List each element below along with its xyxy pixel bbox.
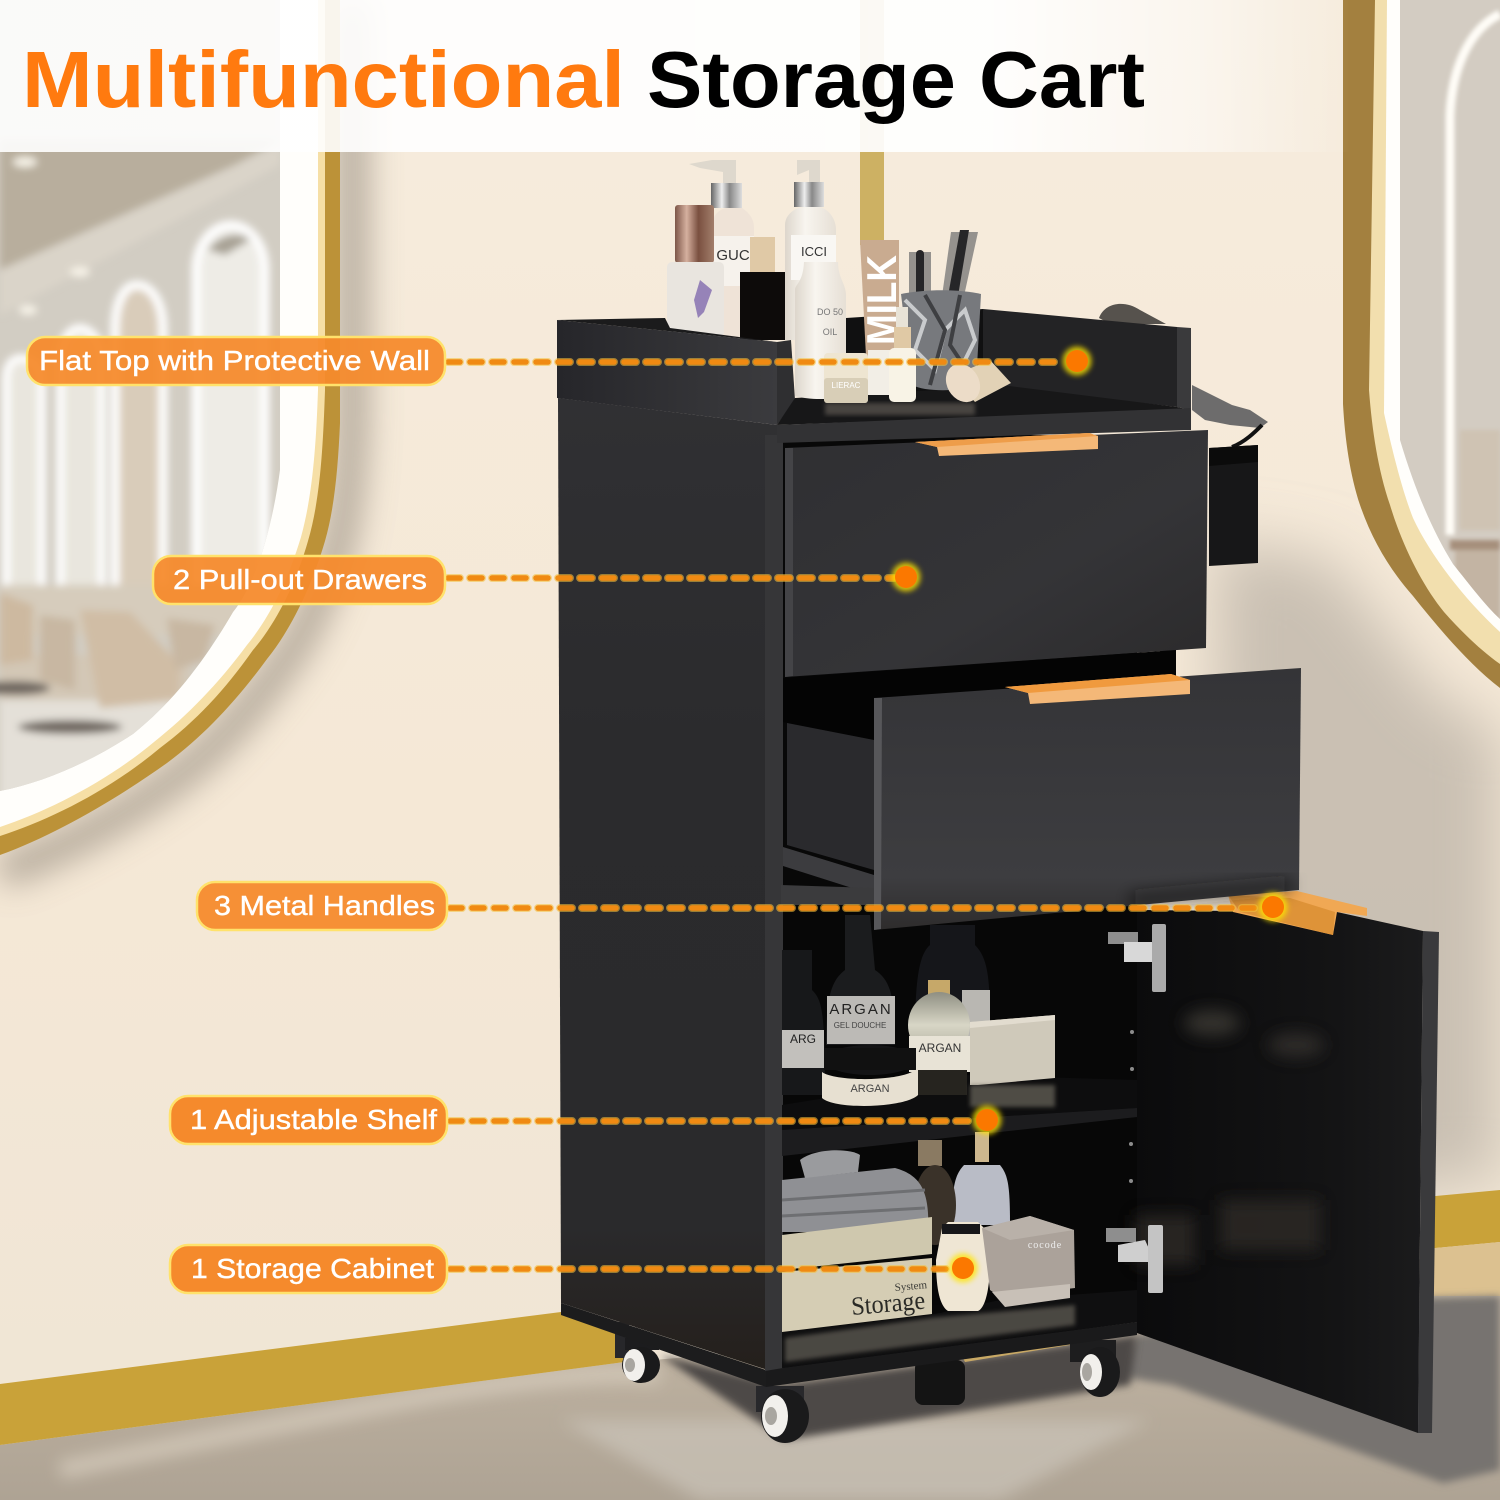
storage box bottom: Storage	[850, 1286, 926, 1321]
drawer two interior	[781, 650, 1176, 905]
blue white bottle	[952, 1132, 1010, 1225]
top wall left front end	[777, 340, 795, 425]
door reflection blurs	[1135, 1010, 1324, 1265]
adjustable shelf	[782, 1075, 1137, 1156]
cocode box	[982, 1216, 1075, 1307]
callout: pull-out drawers	[153, 556, 920, 604]
drawer two handle	[1005, 674, 1190, 704]
back wall behind cosmetics	[846, 309, 1009, 402]
leader line	[450, 904, 1260, 912]
right stile behind drawers	[1160, 640, 1176, 700]
gold strip behind cosmetics	[860, 0, 884, 245]
dot	[1258, 892, 1288, 922]
title banner	[0, 0, 1500, 152]
right mirror reflected salon	[1395, 0, 1500, 640]
milk tube: MILK	[858, 255, 905, 345]
lying beige cylinder	[939, 358, 1011, 408]
dot	[972, 1106, 1002, 1134]
callout: flat top with protective wall	[27, 337, 1092, 385]
pump bottle 2	[785, 160, 836, 340]
right mirror	[1343, 0, 1500, 688]
callout: storage cabinet	[170, 1245, 978, 1293]
label: 3 Metal Handles	[214, 890, 435, 921]
label: Flat Top with Protective Wall	[39, 345, 430, 376]
caster rear left	[615, 1322, 660, 1383]
left mirror cream edge	[0, 0, 325, 836]
top surface	[777, 386, 1191, 425]
leader line	[450, 1265, 951, 1273]
bottom hinge	[1106, 1225, 1163, 1293]
drawer two lower shadow	[1130, 880, 1290, 905]
cabinet back	[783, 905, 1137, 1305]
floor tan band right	[1425, 1242, 1500, 1296]
left stile	[765, 435, 783, 1371]
leader line	[450, 1117, 975, 1125]
left mirror wall shadow	[0, 0, 352, 872]
pump bottle 1	[689, 160, 754, 340]
top front edge	[777, 408, 1191, 443]
argan bottle middle: ARGAN	[829, 1001, 893, 1018]
door gold handle	[1228, 891, 1367, 935]
left mirror	[0, 0, 352, 872]
folded towels	[782, 1150, 928, 1232]
floor	[0, 1242, 1500, 1500]
argan jar	[822, 1045, 918, 1106]
storage box bottom	[782, 1258, 932, 1332]
storage box bottom: System	[894, 1279, 928, 1294]
drawer one	[785, 430, 1208, 677]
argan bottle back right	[915, 925, 990, 1040]
gold baseboard right	[1425, 1190, 1500, 1249]
drawer two front	[874, 668, 1301, 930]
door shadow on floor	[1110, 1296, 1500, 1483]
hair dryer body and cord	[1192, 385, 1268, 447]
door edge	[1418, 931, 1439, 1433]
white bottle front: OIL	[823, 327, 837, 337]
label	[170, 1096, 447, 1144]
argan bottle left	[782, 950, 825, 1095]
top wall right	[983, 309, 1177, 407]
caster front left	[756, 1386, 809, 1443]
label	[170, 1245, 447, 1293]
label	[197, 882, 447, 930]
top wall left side	[557, 320, 777, 425]
right mirror gold frame	[1343, 0, 1500, 688]
title	[22, 35, 1145, 124]
cabinet base front	[766, 1322, 1137, 1387]
cart shadow on floor	[660, 1335, 1137, 1440]
callout: adjustable shelf	[170, 1096, 1002, 1144]
perfume bottle: ARGAN	[919, 1041, 961, 1055]
right mirror cream edge	[1369, 0, 1500, 664]
crystal cup	[901, 290, 981, 390]
milk tube	[858, 240, 905, 395]
pump bottle 2: ICCI	[801, 244, 827, 259]
cream cup	[936, 1222, 990, 1311]
black box with cap	[740, 237, 785, 340]
label	[153, 556, 445, 604]
cart base side band	[561, 1303, 766, 1387]
lierac jar	[824, 353, 868, 403]
cart left side panel	[558, 398, 777, 1373]
drawer one handle	[915, 433, 1098, 456]
cosmetics on top front	[795, 230, 1011, 408]
bottom surface	[782, 1290, 1137, 1368]
white bottle front: DO 50	[817, 307, 843, 317]
top hinge	[1108, 924, 1166, 992]
storage box top	[782, 1217, 932, 1270]
wall shadow right of cart	[1215, 540, 1500, 1190]
title orange part: Multifunctional	[22, 35, 625, 124]
front frame and interior	[767, 435, 1137, 1372]
brushes	[909, 230, 978, 296]
bottom reflection	[785, 1305, 1075, 1362]
caster front right	[1070, 1340, 1120, 1397]
dropper bottle	[889, 307, 916, 402]
shelf reflection	[970, 1085, 1055, 1107]
pump bottle 1: GUC	[716, 247, 750, 264]
amber bottle	[914, 1140, 956, 1245]
rose gold cap bottle	[667, 205, 724, 337]
dot	[892, 562, 920, 592]
dot	[948, 1254, 978, 1282]
label: 2 Pull-out Drawers	[173, 564, 427, 595]
caster hidden middle	[915, 1360, 965, 1405]
argan jar: ARGAN	[850, 1083, 890, 1095]
floor marble highlights	[60, 1374, 1150, 1500]
left mirror white light	[0, 0, 318, 827]
cosmetics behind left wall	[667, 160, 836, 340]
storage cart	[557, 160, 1439, 1443]
lierac jar: LIERAC	[832, 381, 861, 390]
argan bottle left: ARG	[790, 1032, 816, 1046]
argan bottle middle	[826, 915, 895, 1045]
top surface reflection	[825, 403, 975, 415]
cream box upper	[970, 1015, 1055, 1085]
label	[27, 337, 445, 385]
shelf pin holes	[1129, 1030, 1134, 1183]
hair dryer nozzle	[1099, 304, 1166, 324]
cabinet contents	[782, 905, 1137, 1368]
leader line	[448, 358, 1064, 366]
cocode box: cocode	[1028, 1240, 1062, 1251]
leader line	[448, 574, 894, 582]
label: 1 Adjustable Shelf	[190, 1104, 437, 1135]
gold glow under cart	[960, 1330, 1133, 1362]
left mirror gold frame	[0, 0, 340, 855]
argan bottle middle: GEL DOUCHE	[834, 1021, 886, 1030]
perfume bottle	[908, 980, 971, 1095]
callout: metal handles	[197, 882, 1288, 930]
title black part: Storage Cart	[647, 35, 1145, 124]
label: 1 Storage Cabinet	[191, 1253, 434, 1284]
top wall left inner rim	[557, 318, 777, 342]
right mirror white light	[1384, 0, 1500, 632]
top wall right end	[1177, 327, 1191, 410]
hair dryer holder	[1209, 445, 1258, 566]
white bottle front	[795, 262, 846, 399]
left mirror reflected salon	[0, 142, 280, 791]
cabinet door	[1135, 891, 1439, 1433]
gold baseboard left	[0, 1312, 640, 1445]
dot	[1062, 346, 1092, 376]
